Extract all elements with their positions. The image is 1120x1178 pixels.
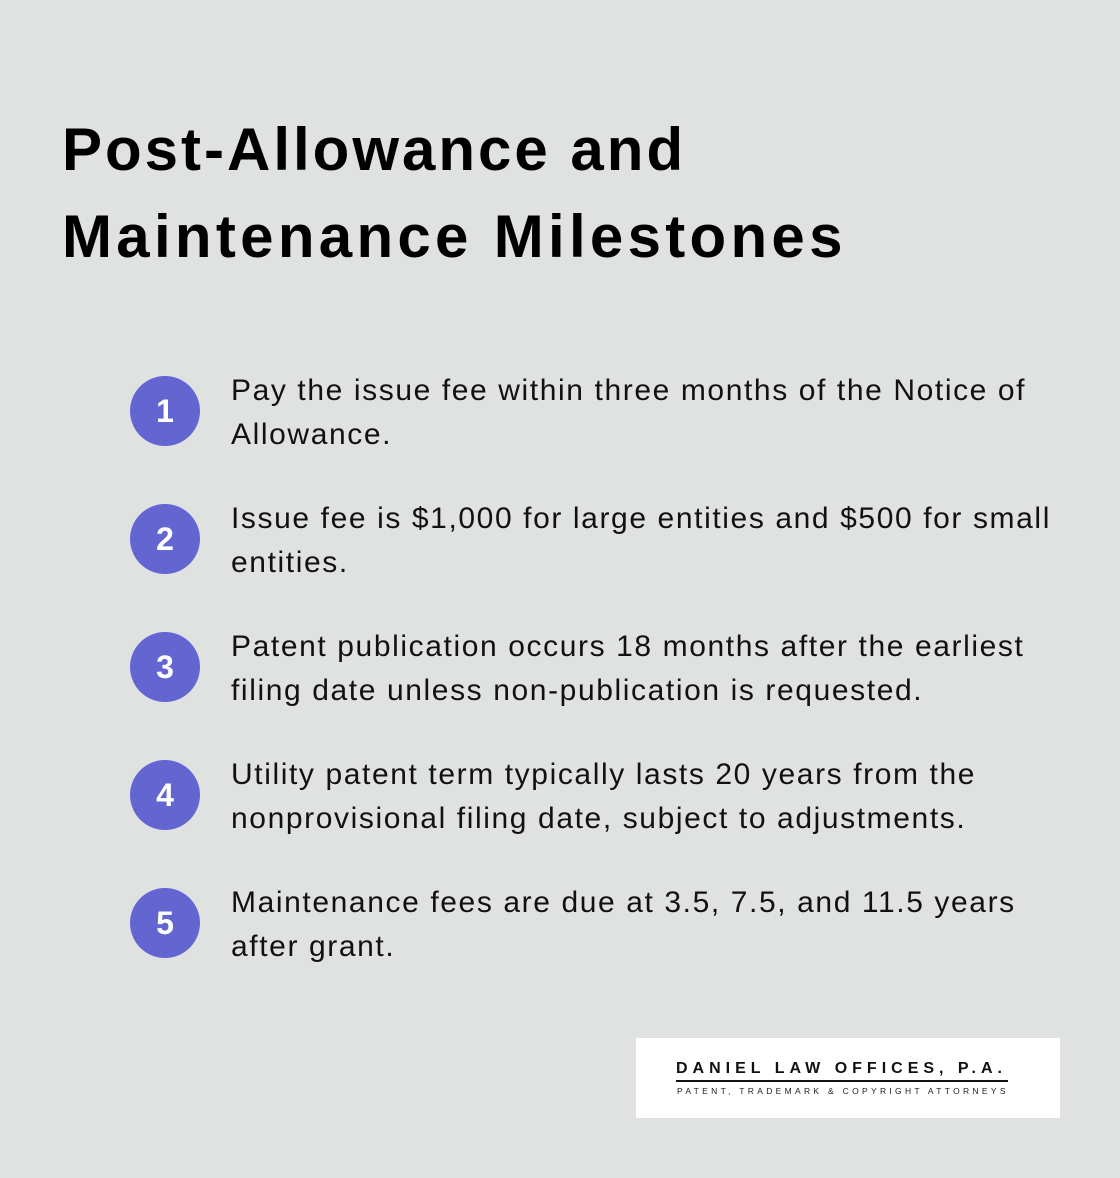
icon: number 2: 2 bbox=[156, 521, 174, 557]
text 3: Patent publication occurs 18 months after the earliest bbox=[231, 630, 1024, 663]
item 3 bbox=[130, 630, 1024, 707]
logo: DANIEL LAW OFFICES, P.A. bbox=[676, 1060, 1007, 1077]
icon: number 5 bbox=[130, 888, 200, 958]
icon: number 1: 1 bbox=[156, 393, 174, 429]
logo: PATENT, TRADEMARK & COPYRIGHT ATTORNEYS bbox=[677, 1086, 1009, 1096]
title: Post-Allowance and bbox=[62, 116, 686, 183]
title bbox=[62, 116, 847, 270]
item 5 bbox=[130, 886, 1016, 963]
logo bbox=[636, 1038, 1060, 1118]
icon: number 3 bbox=[130, 632, 200, 702]
icon: number 4: 4 bbox=[156, 777, 174, 813]
text 3 bbox=[231, 630, 1024, 707]
text 2: Issue fee is $1,000 for large entities and $500 for small bbox=[231, 502, 1051, 535]
icon: number 4 bbox=[130, 760, 200, 830]
text 5: Maintenance fees are due at 3.5, 7.5, and 11.5 years bbox=[231, 886, 1016, 919]
text 4: nonprovisional filing date, subject to adjustments. bbox=[231, 802, 966, 835]
title: Maintenance Milestones bbox=[62, 203, 847, 270]
item 1 bbox=[130, 374, 1026, 451]
text 1: Pay the issue fee within three months of the Notice of bbox=[231, 374, 1026, 407]
icon: number 3: 3 bbox=[156, 649, 174, 685]
text 2: entities. bbox=[231, 546, 349, 579]
text 4 bbox=[231, 758, 976, 835]
item 2 bbox=[130, 502, 1051, 579]
text 3: filing date unless non-publication is requested. bbox=[231, 674, 923, 707]
text 1: Allowance. bbox=[231, 418, 392, 451]
icon: number 2 bbox=[130, 504, 200, 574]
icon: number 5: 5 bbox=[156, 905, 174, 941]
item 4 bbox=[130, 758, 976, 835]
text 5: after grant. bbox=[231, 930, 395, 963]
text 4: Utility patent term typically lasts 20 years from the bbox=[231, 758, 976, 791]
icon: number 1 bbox=[130, 376, 200, 446]
text 1 bbox=[231, 374, 1026, 451]
text 2 bbox=[231, 502, 1051, 579]
text 5 bbox=[231, 886, 1016, 963]
